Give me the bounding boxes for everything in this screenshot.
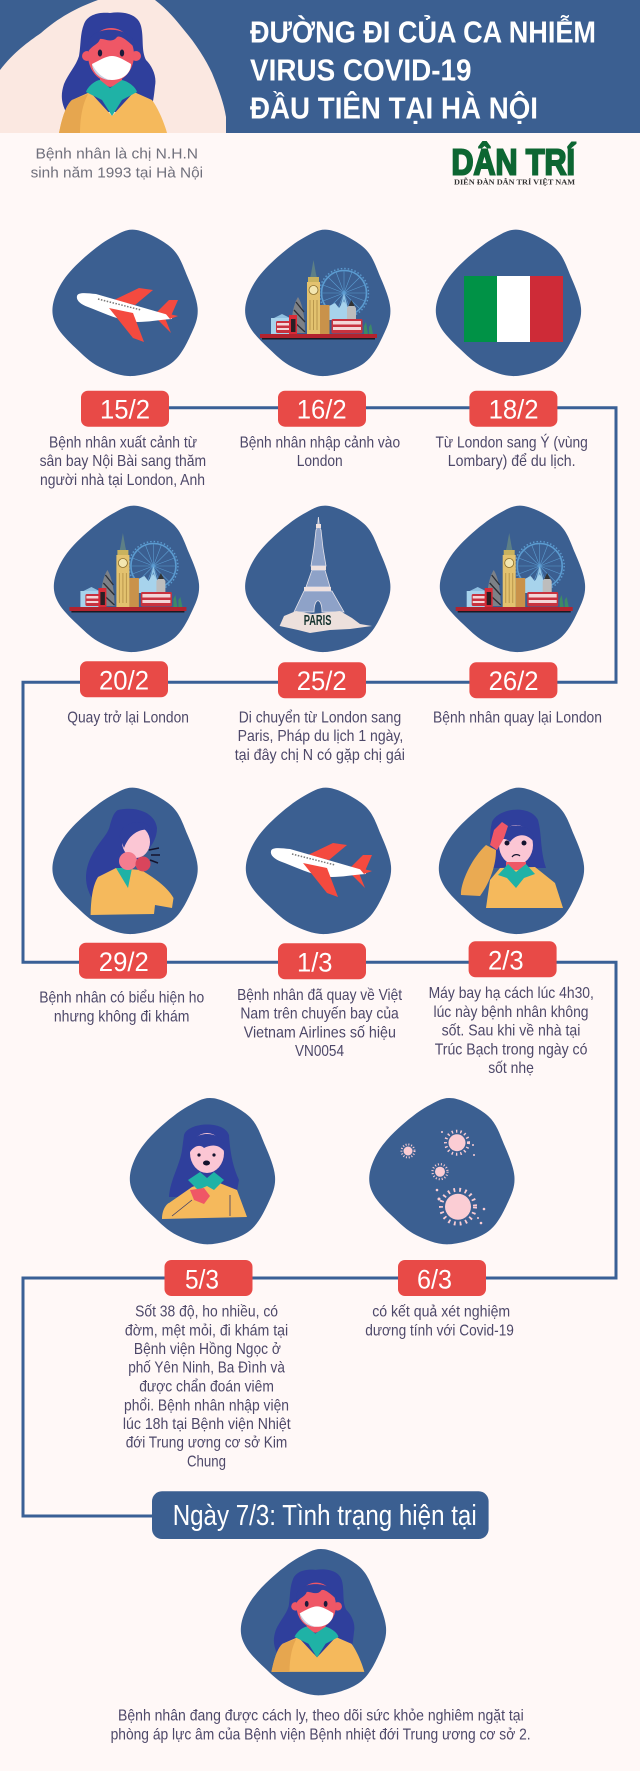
date badge 2/3: 2/3 [488, 945, 524, 975]
icon: airplane [246, 788, 391, 934]
date badge 15/2: 15/2 [100, 394, 150, 424]
patient description: Bệnh nhân là chị N.H.N [36, 145, 198, 162]
text: 5/3: phố Yên Ninh, Ba Đình và [128, 1360, 285, 1377]
icon: Italian flag [436, 230, 581, 376]
text: 2/3: Máy bay hạ cách lúc 4h30, [429, 985, 594, 1002]
date badge 29/2: 29/2 [99, 947, 149, 977]
date badge 5/3: 5/3 [185, 1264, 219, 1294]
step: 6/3 [365, 1098, 515, 1339]
step: 20/2 [54, 506, 199, 726]
step: 15/2 [40, 230, 206, 489]
icon: sick woman [130, 1098, 275, 1244]
text: 5/3: lúc 18h tại Bệnh viện Nhiệt [123, 1416, 291, 1433]
text: 29/2: nhưng không đi khám [54, 1009, 189, 1026]
title: VIRUS COVID-19 [250, 53, 472, 88]
step: 5/3 [123, 1098, 291, 1471]
step: 25/2 [235, 506, 405, 764]
date badge 18/2: 18/2 [489, 394, 539, 424]
text: 16/2: Bệnh nhân nhập cảnh vào [240, 434, 400, 451]
text: current status: Bệnh nhân đang được cách ly, theo dõi sức khỏe nghiêm ngặt tại [118, 1708, 524, 1725]
date badge 6/3: 6/3 [417, 1264, 452, 1294]
date badge 18/2 [469, 391, 557, 427]
text: 25/2: Paris, Pháp du lịch 1 ngày, [238, 728, 403, 745]
step: 2/3 [429, 788, 594, 1077]
text: 29/2: Bệnh nhân có biểu hiện ho [39, 989, 204, 1007]
text: 16/2: London [297, 453, 343, 470]
icon: London skyline [54, 506, 199, 652]
date badge 1/3: 1/3 [297, 948, 332, 978]
date badge 26/2: 26/2 [489, 666, 539, 696]
text: 1/3 [237, 987, 403, 1060]
date badge 2/3 [469, 941, 557, 977]
step: 1/3 [237, 788, 403, 1060]
date badge 16/2 [278, 391, 366, 427]
text: 18/2: Từ London sang Ý (vùng [436, 432, 588, 451]
text: current status [111, 1708, 531, 1743]
timeline connector [23, 408, 616, 1516]
step: 29/2 [39, 788, 204, 1026]
text: 2/3 [429, 985, 594, 1077]
text: 5/3 [123, 1304, 291, 1471]
text: 5/3: Bệnh viện Hồng Ngọc ở [134, 1341, 281, 1358]
icon: virus particles [369, 1098, 515, 1244]
title [250, 14, 596, 125]
text: 6/3: có kết quả xét nghiệm [372, 1304, 510, 1321]
text: 26/2: Bệnh nhân quay lại London [433, 709, 602, 726]
logo: Dân Trí: DIỄN ĐÀN DÂN TRÍ VIỆT NAM [454, 176, 575, 186]
text: 5/3: Chung [187, 1454, 226, 1471]
title: ĐẦU TIÊN TẠI HÀ NỘI [250, 89, 538, 125]
text: 5/3: được chẩn đoán viêm [139, 1378, 274, 1396]
text: 6/3 [365, 1304, 514, 1339]
icon: London skyline [440, 506, 585, 652]
date badge 5/3 [164, 1260, 252, 1296]
date badge 6/3 [398, 1260, 486, 1296]
text: 5/3: đờm, mệt mỏi, đi khám tại [125, 1322, 288, 1339]
text: 15/2: sân bay Nội Bài sang thăm [40, 453, 206, 470]
text: current status: phòng áp lực âm của Bệnh viện Bệnh nhiệt đới Trung ương cơ sở 2. [111, 1726, 531, 1743]
icon: woman with headache [439, 788, 584, 934]
date badge 20/2 [80, 661, 168, 697]
text: 15/2: Bệnh nhân xuất cảnh từ [49, 434, 197, 451]
icon: coughing woman [52, 788, 198, 934]
text: 29/2 [39, 989, 204, 1026]
heading: current status [152, 1491, 489, 1539]
text: 25/2: tại đây chị N có gặp chị gái [235, 747, 405, 764]
text: 6/3: dương tính với Covid-19 [365, 1322, 514, 1339]
date badge 25/2: 25/2 [297, 666, 347, 696]
label: Paris: PARIS [304, 612, 331, 629]
text: 15/2 [40, 434, 206, 489]
text: 1/3: Vietnam Airlines số hiệu [244, 1024, 396, 1041]
icon: London skyline [245, 230, 390, 376]
text: 2/3: lúc này bệnh nhân không [434, 1004, 588, 1021]
text: 25/2 [235, 708, 405, 764]
text: 2/3: sốt nhẹ [488, 1060, 534, 1077]
logo: Dân Trí: DÂN TRÍ [452, 140, 576, 182]
icon: patient wearing mask, current status [241, 1549, 386, 1695]
decorative pink shape behind patient [0, 0, 226, 133]
date badge 26/2 [469, 662, 557, 698]
title: ĐƯỜNG ĐI CỦA CA NHIỄM [250, 14, 596, 50]
text: 2/3: Trúc Bạch trong ngày có [435, 1041, 587, 1058]
icon: patient wearing mask [59, 12, 167, 133]
text: 5/3: phổi. Bệnh nhân nhập viện [124, 1396, 289, 1414]
text: 15/2: người nhà tại London, Anh [40, 472, 205, 489]
date badge 25/2 [278, 662, 366, 698]
text: 5/3: đới Trung ương cơ sở Kim [126, 1435, 287, 1452]
icon: Eiffel tower, Paris [245, 506, 390, 652]
date badge 29/2 [79, 943, 167, 979]
text: 16/2 [240, 434, 400, 470]
header banner [0, 0, 640, 133]
text: 2/3: sốt. Sau khi về nhà tại [442, 1023, 580, 1040]
text: 18/2: Lombary) để du lịch. [448, 452, 576, 470]
patient description [31, 145, 203, 181]
text: 25/2: Di chuyển từ London sang [239, 708, 401, 726]
text: 1/3: Nam trên chuyến bay của [240, 1006, 399, 1023]
date badge 20/2: 20/2 [99, 665, 149, 695]
date badge 16/2: 16/2 [297, 394, 347, 424]
text: 1/3: Bệnh nhân đã quay về Việt [237, 987, 403, 1004]
icon: airplane [52, 230, 198, 376]
text: 18/2 [436, 432, 588, 470]
step: 18/2 [436, 230, 588, 470]
patient description: sinh năm 1993 tại Hà Nội [31, 164, 203, 181]
date badge 1/3 [278, 943, 366, 979]
step: 26/2 [433, 506, 602, 726]
date badge 15/2 [81, 391, 169, 427]
text: 20/2: Quay trở lại London [67, 709, 189, 726]
text: 5/3: Sốt 38 độ, ho nhiều, có [135, 1304, 278, 1321]
step: 16/2 [240, 230, 400, 470]
heading: current status: Ngày 7/3: Tình trạng hiện tại [173, 1500, 477, 1532]
text: 1/3: VN0054 [295, 1043, 344, 1060]
